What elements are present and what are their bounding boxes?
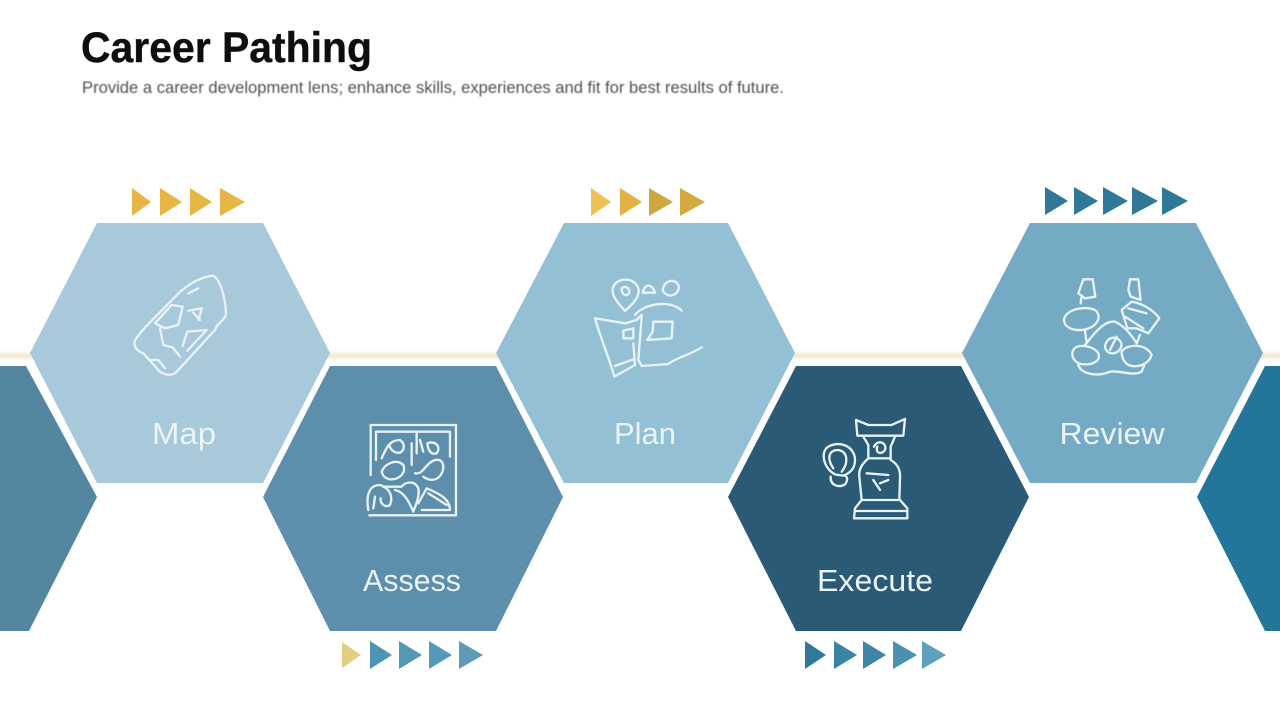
- step: Plan: [496, 223, 795, 483]
- step: Review: [962, 223, 1263, 483]
- step: Execute: [728, 366, 1029, 631]
- label: Plan: Plan: [614, 416, 676, 451]
- icon: plan map with pin and person: [595, 280, 702, 377]
- label: Review: Review: [1060, 416, 1165, 451]
- icon: assessment grid: [368, 425, 456, 515]
- icon: map: [134, 276, 226, 375]
- arrows: above Map: [132, 188, 245, 216]
- arrows: above Review: [1045, 187, 1188, 215]
- hexagon: left edge partial: [0, 366, 97, 631]
- step: Map: [30, 223, 330, 483]
- hexagon: right edge partial: [1197, 366, 1280, 631]
- label: Execute: Execute: [817, 563, 933, 598]
- label: Assess: Assess: [363, 563, 461, 598]
- icon: review cluster: [1064, 279, 1159, 374]
- title: Career Pathing: [81, 24, 372, 72]
- step: Assess: [263, 366, 563, 631]
- icon: execute tower and bulb: [824, 419, 907, 518]
- arrows: below Execute: [805, 641, 946, 669]
- subtitle: Provide a career development lens; enhance skills, experiences and fit for best results of future.: [82, 78, 784, 97]
- label: Map: Map: [152, 416, 216, 451]
- arrows: below Assess: [342, 641, 483, 669]
- arrows: above Plan: [591, 188, 705, 216]
